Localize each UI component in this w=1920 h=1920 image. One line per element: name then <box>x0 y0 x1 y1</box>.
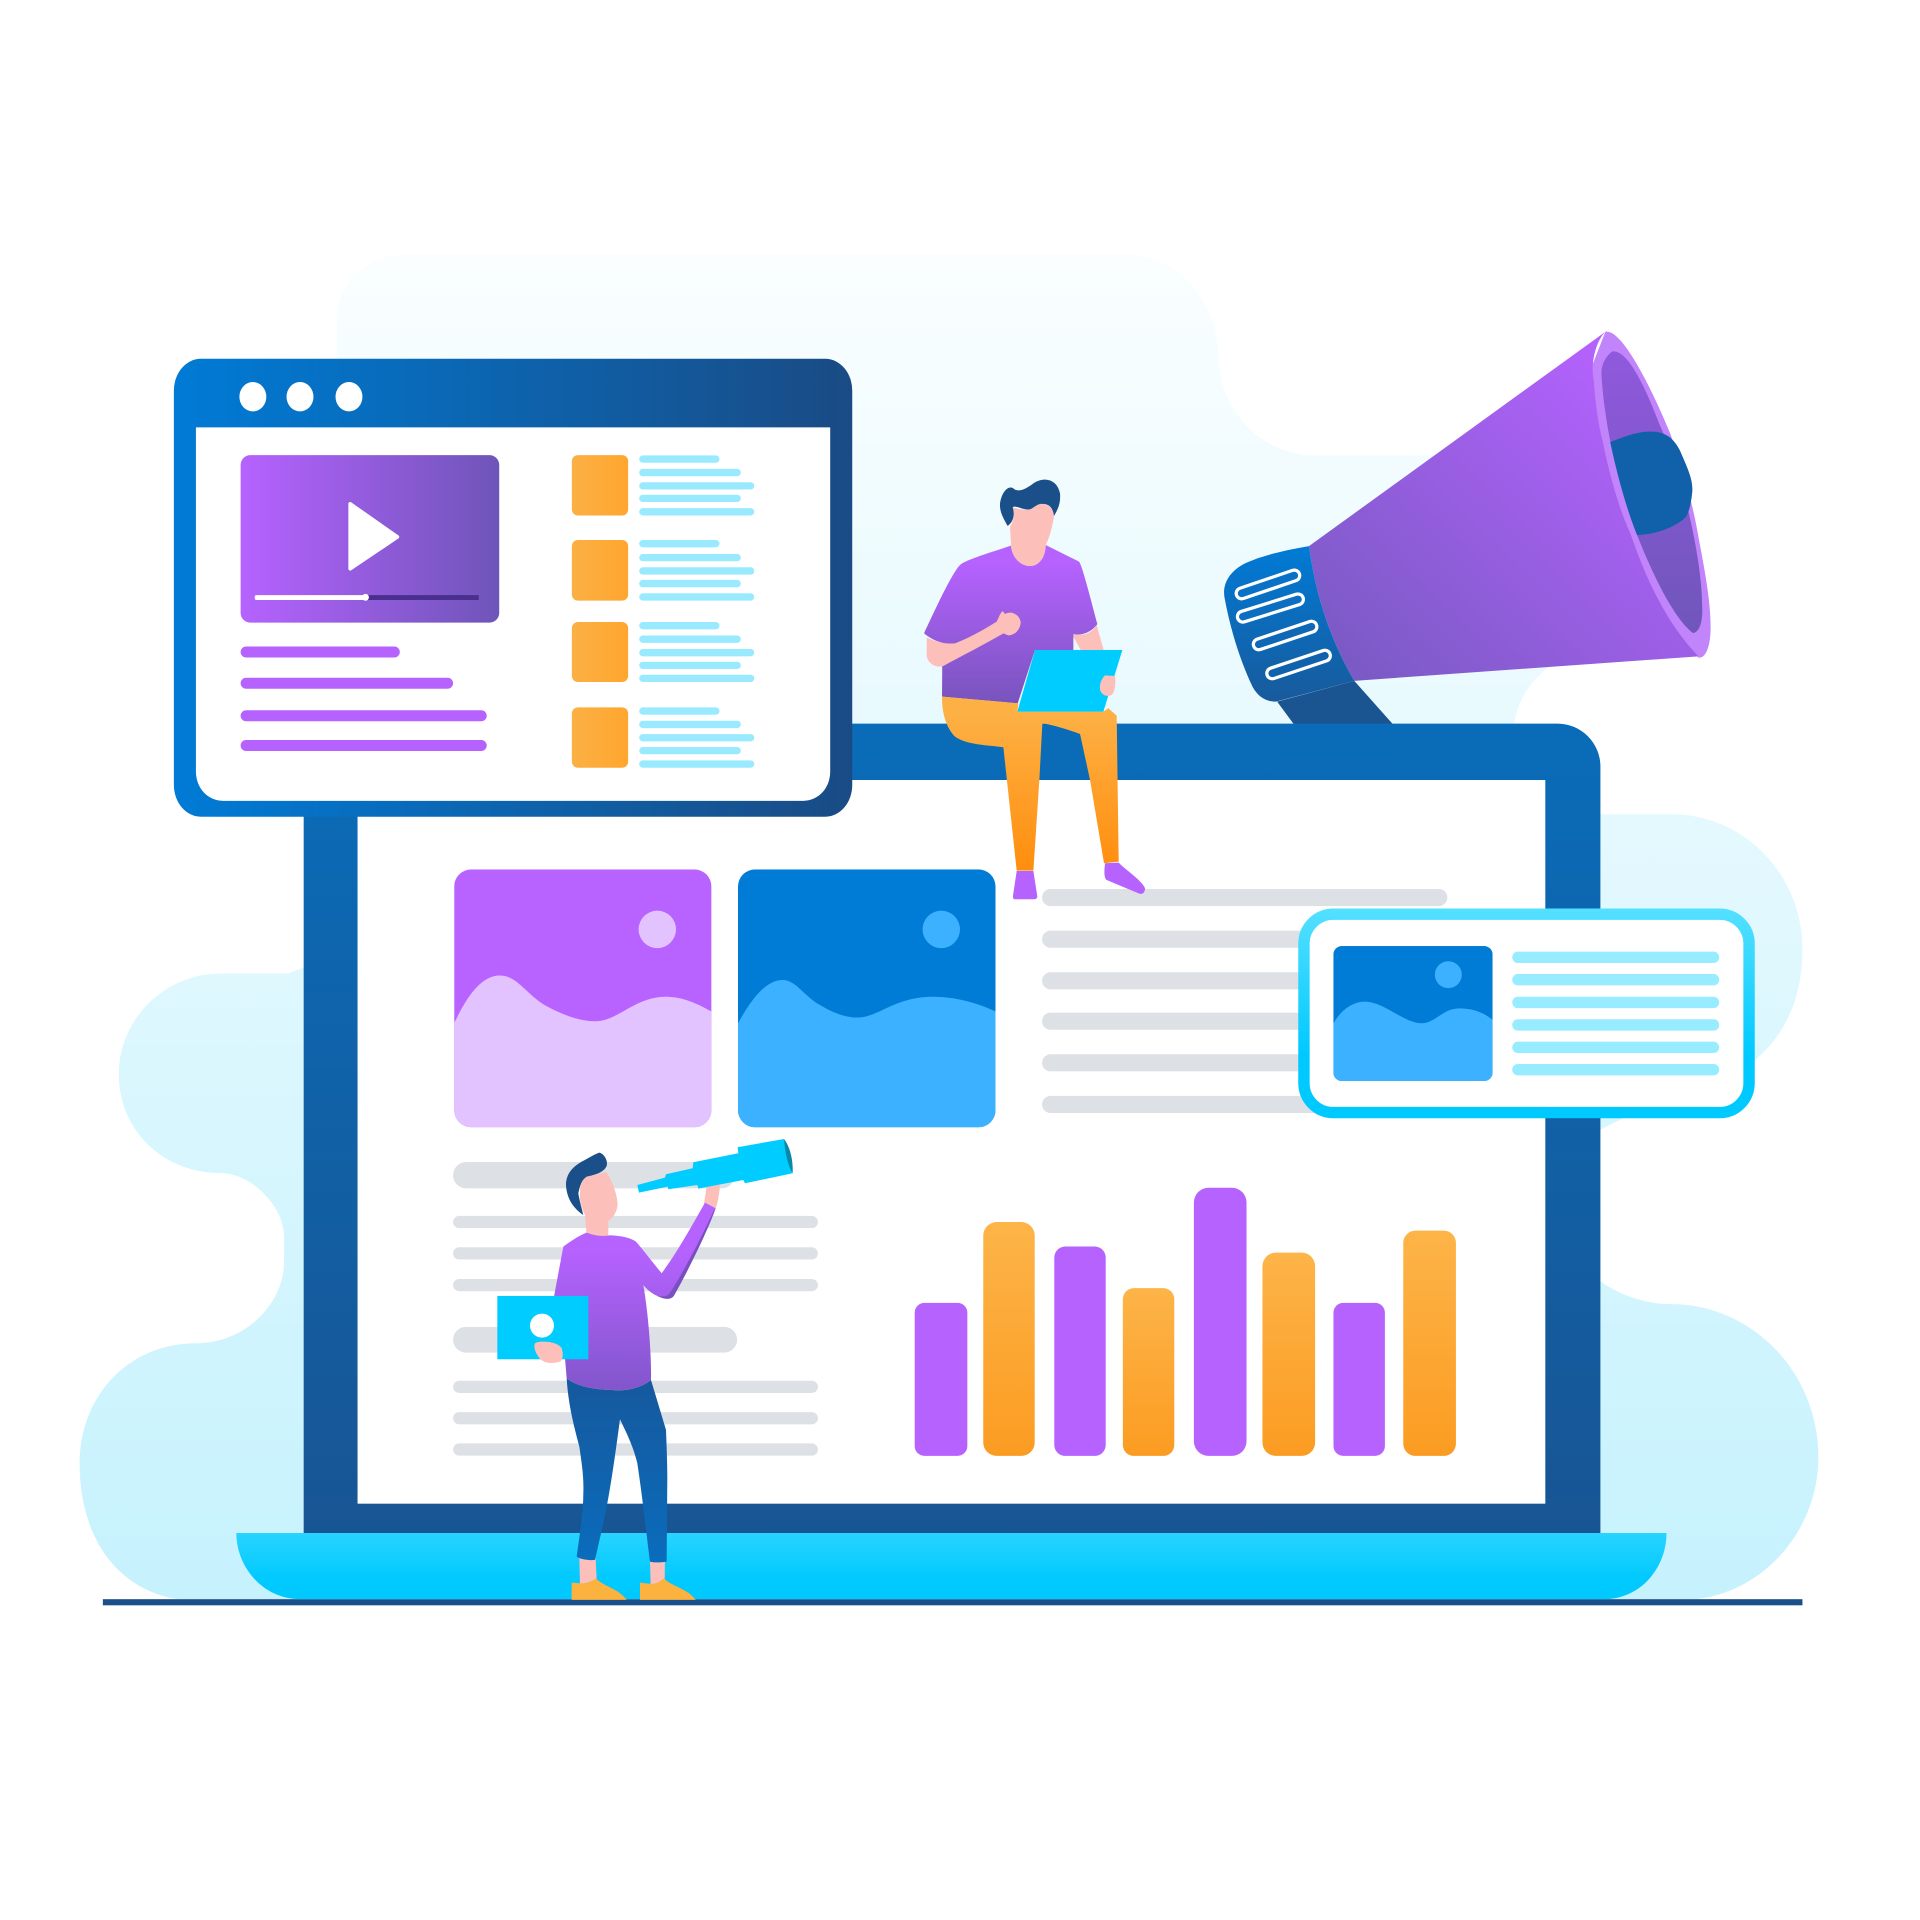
shoes <box>572 1578 696 1600</box>
ground line <box>103 1599 1802 1605</box>
window content area <box>196 427 830 801</box>
cyan text lines <box>639 455 754 768</box>
callout image <box>1333 946 1493 1081</box>
text lines right of images <box>1042 889 1447 1113</box>
callout card <box>1304 914 1749 1113</box>
bar chart <box>915 1188 1456 1456</box>
image card purple <box>454 869 711 1128</box>
image card blue <box>738 869 996 1128</box>
shirt <box>924 545 1097 703</box>
megaphone inner <box>1601 351 1702 633</box>
pants <box>942 697 1119 871</box>
laptop base <box>236 1533 1667 1599</box>
text lines lower left <box>453 1162 818 1456</box>
laptop <box>236 724 1667 1599</box>
callout frame <box>1304 914 1749 1113</box>
megaphone handle <box>1277 681 1393 725</box>
telescope lens <box>784 1139 793 1173</box>
neck and face <box>580 1172 618 1240</box>
callout text lines <box>1512 952 1719 1075</box>
hair <box>1000 480 1060 526</box>
neck and face <box>1010 504 1054 566</box>
megaphone rim <box>1577 332 1711 658</box>
megaphone diaphragm <box>1610 432 1692 535</box>
hand on tablet <box>1100 675 1115 696</box>
sleeve shading <box>657 1208 716 1299</box>
shoes <box>1013 863 1145 899</box>
orange thumbnails <box>572 455 628 768</box>
tablet <box>497 1296 588 1359</box>
telescope <box>637 1139 793 1193</box>
sweater <box>554 1203 716 1390</box>
purple text lines <box>241 647 487 751</box>
laptop screen frame <box>304 724 1600 1533</box>
pants <box>567 1378 667 1562</box>
raised arm <box>927 611 1021 667</box>
background cloud blob <box>80 255 1818 1599</box>
megaphone collar <box>1224 546 1354 702</box>
megaphone cone <box>1309 332 1698 681</box>
tablet circle <box>530 1314 554 1338</box>
person standing with telescope <box>497 1139 793 1600</box>
legs <box>579 1557 665 1586</box>
tablet <box>1017 650 1122 712</box>
right forearm <box>1072 625 1104 652</box>
browser window <box>174 359 852 817</box>
play icon <box>350 504 397 569</box>
window dots <box>239 382 362 411</box>
megaphone <box>1224 332 1711 725</box>
megaphone slots <box>1242 576 1325 673</box>
hand holding telescope <box>704 1185 720 1210</box>
laptop screen <box>358 780 1545 1504</box>
hand on tablet <box>534 1342 563 1363</box>
hair <box>566 1153 607 1215</box>
person seated with tablet <box>924 480 1145 899</box>
video player <box>241 455 499 623</box>
window frame <box>174 359 852 817</box>
illustration <box>80 332 1818 1606</box>
progress bar <box>255 594 479 601</box>
